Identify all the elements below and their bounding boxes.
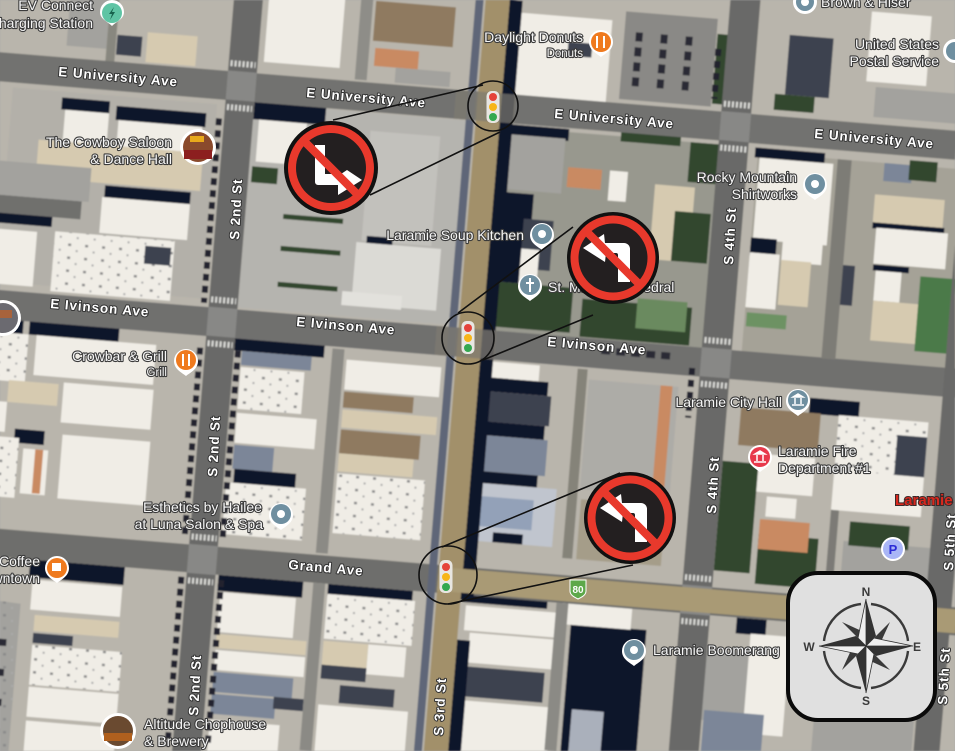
compass ring: [824, 604, 908, 688]
place: Esthetics by Hailee: at Luna Salon & Spa: [135, 516, 263, 532]
place: Esthetics by Hailee: Esthetics by Hailee: [143, 499, 262, 515]
place: Laramie Boomerang: Laramie Boomerang: [653, 642, 780, 658]
place: Crowbar and Grill: [72, 348, 198, 379]
place: Rocky Mountain Shirtworks: Shirtworks: [732, 186, 797, 202]
compass letters: [803, 585, 921, 708]
label: S 5th St: S 5th St: [935, 647, 953, 705]
place: St. Mark's Cathedral: [518, 274, 674, 301]
place: Esthetics by Hailee: [135, 499, 293, 532]
place: Laramie Soup Kitchen: Laramie Soup Kitchen: [386, 227, 524, 243]
icon: traffic light: [440, 560, 452, 593]
place: The Cowboy Saloon: [46, 129, 216, 167]
label: S 4th St: S 4th St: [704, 456, 722, 514]
icon: no left turn sign: [584, 472, 676, 564]
place: Daylight Donuts: [484, 29, 613, 60]
route 80 shield: [570, 580, 586, 599]
label: E Ivinson Ave: E Ivinson Ave: [50, 296, 150, 320]
west blocks: [0, 87, 217, 298]
label: S 4th St: S 4th St: [721, 207, 739, 265]
label: E University Ave: E University Ave: [306, 85, 427, 110]
place: Laramie Fire Department: Department #1: [778, 460, 871, 476]
place: Laramie Soup Kitchen: [386, 223, 554, 250]
callout lines: [458, 227, 593, 360]
callout lines: [333, 85, 500, 195]
place: Altitude Chophouse: Altitude Chophouse: [144, 716, 266, 732]
compass star: [819, 599, 913, 693]
street intersections: [188, 85, 750, 601]
place: Laramie Boomerang: [622, 639, 780, 666]
third street with coloured roadway: [414, 0, 484, 751]
alleys: [355, 0, 376, 80]
block E: [483, 361, 540, 381]
place: photo marker: [0, 300, 21, 336]
label: S 2nd St: S 2nd St: [227, 178, 245, 240]
label: S 2nd St: S 2nd St: [205, 415, 223, 477]
callout: Ivinson Ave traffic light: [442, 212, 659, 364]
place: Daylight Donuts: Daylight Donuts: [484, 29, 583, 45]
label: Grand Ave: Grand Ave: [288, 557, 364, 579]
place: Daylight Donuts: Donuts: [547, 48, 583, 60]
callout circle: [442, 312, 494, 364]
block A: [238, 103, 474, 326]
block D: [234, 336, 325, 358]
parked cars: [167, 118, 219, 746]
label: E University Ave: E University Ave: [58, 64, 179, 89]
block B: [485, 127, 726, 349]
place: United States Postal Service: Postal Service: [850, 53, 939, 69]
place: Laramie Fire Department: Laramie Fire: [778, 443, 857, 459]
compass letters: S: [862, 694, 870, 708]
icon: no left turn sign: [284, 121, 378, 215]
label: S 2nd St: S 2nd St: [186, 654, 204, 716]
label: E Ivinson Ave: E Ivinson Ave: [296, 314, 396, 338]
callout lines: [442, 473, 633, 604]
label: E University Ave: E University Ave: [814, 126, 935, 151]
label: E Ivinson Ave: E Ivinson Ave: [547, 334, 647, 358]
callout: Grand Ave traffic light: [419, 472, 676, 604]
place: Rocky Mountain Shirtworks: Rocky Mountain: [697, 169, 797, 185]
place: Rocky Mountain Shirtworks: [697, 169, 827, 202]
compass letters: E: [913, 640, 921, 654]
north centre blocks: [264, 0, 345, 68]
west lower block: [0, 314, 24, 334]
grand avenue coloured roadway: [437, 567, 955, 633]
icon: traffic light: [462, 321, 474, 354]
icon: no left turn sign: [567, 212, 659, 304]
place: Laramie city label: Laramie: [895, 492, 953, 509]
place: EV Connect: [0, 0, 124, 31]
place: Laramie City Hall: [675, 389, 810, 416]
label: E University Ave: E University Ave: [554, 106, 675, 131]
icon: traffic light: [486, 91, 500, 123]
place: Brown and Hiser: [793, 0, 911, 14]
route 80 shield: 80: [572, 585, 584, 596]
south blocks: [29, 559, 125, 585]
callout circle: [468, 81, 518, 131]
callout: University Ave traffic light: [284, 81, 518, 215]
place: The Cowboy Saloon: The Cowboy Saloon: [46, 134, 172, 150]
compass rose panel: [788, 573, 935, 720]
block F: [809, 398, 860, 418]
compass letters: W: [803, 640, 815, 654]
streets: [0, 52, 955, 160]
place: Crowbar and Grill: Crowbar & Grill: [72, 348, 167, 364]
place: Altitude Chophouse: & Brewery: [144, 733, 209, 749]
north-west blocks: [145, 32, 198, 66]
place: United States Postal Service: United States: [855, 36, 939, 52]
place: parking marker: [881, 537, 905, 561]
place: Laramie City Hall: Laramie City Hall: [675, 394, 782, 410]
block C: [742, 153, 955, 370]
place: Coffee Downtown: [0, 553, 69, 586]
place: The Cowboy Saloon: & Dance Hall: [90, 151, 172, 167]
callout circle: [419, 546, 477, 604]
place: Altitude Chophouse: [100, 713, 266, 749]
compass letters: N: [862, 585, 870, 599]
crosswalks: [188, 63, 750, 623]
place: Crowbar and Grill: Grill: [147, 367, 167, 379]
place: United States Postal Service: [850, 36, 955, 69]
label: S 3rd St: S 3rd St: [431, 677, 449, 736]
place: Laramie Fire Department: [748, 443, 871, 476]
place: St. Mark's Cathedral: St. Mark's Cathedral: [548, 279, 674, 295]
place: Coffee Downtown: Coffee: [0, 553, 40, 569]
place: parking marker: P: [889, 542, 898, 557]
